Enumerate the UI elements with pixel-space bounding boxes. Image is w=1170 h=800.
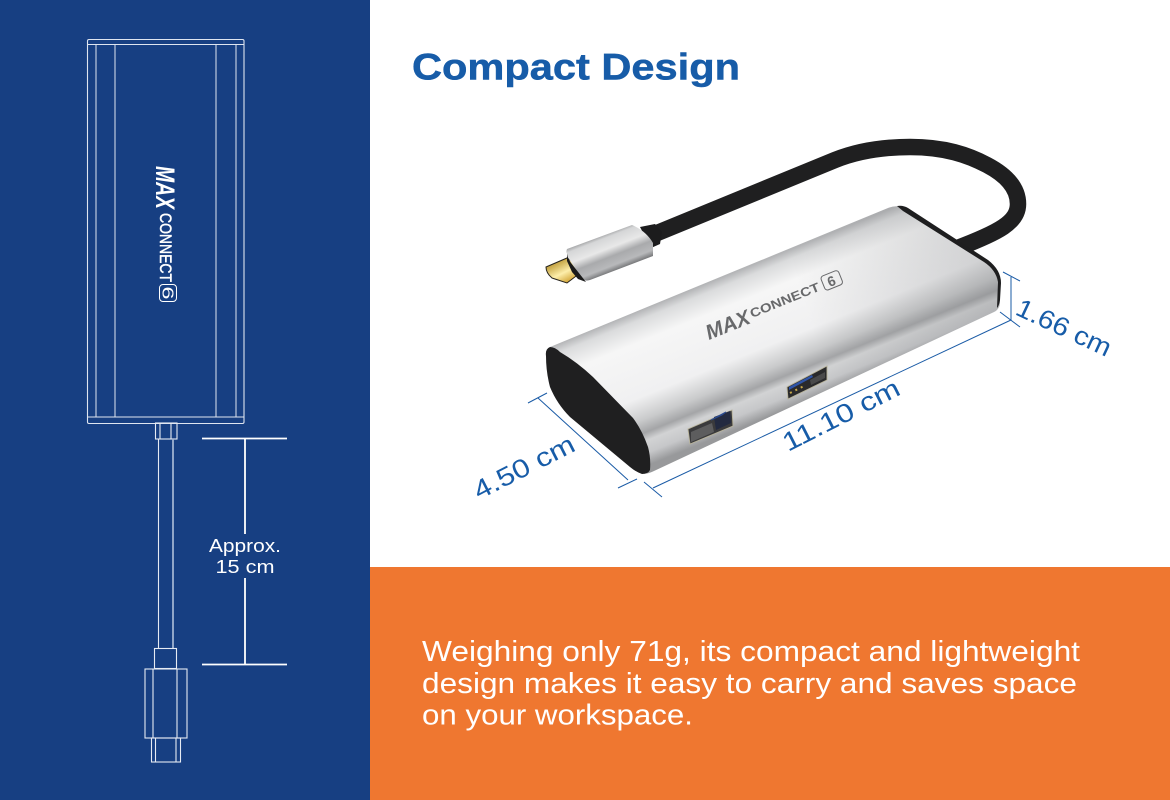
dimension: height 1.66 cm [1000, 272, 1117, 363]
logo: Max Connect 6 on line drawing: MAX [150, 166, 180, 210]
hub body [550, 206, 1000, 474]
text block: product description: on your workspace. [422, 700, 693, 732]
dimension: length 11.10 cm: 11.10 cm [777, 373, 905, 457]
line drawing: USB-C cable and connector [145, 423, 187, 762]
USB-C gold tip [546, 258, 584, 283]
title: Compact Design [412, 46, 740, 88]
logo: Max Connect 6 on hub: CONNECT [748, 280, 822, 321]
dimension: cable length approx 15 cm: Approx. [209, 535, 281, 556]
dimension: cable length approx 15 cm: 15 cm [216, 556, 274, 577]
logo: Max Connect 6 on hub: 6 [825, 272, 838, 290]
product image: USB-C hub [546, 147, 1018, 474]
cable [645, 147, 1018, 249]
text block: product description [422, 636, 1080, 732]
dimension: height 1.66 cm: 1.66 cm [1011, 292, 1117, 363]
panel: blue blueprint background [0, 0, 370, 800]
dimension: length 11.10 cm [644, 320, 1011, 497]
text block: product description: design makes it easy to carry and saves space [422, 668, 1077, 700]
dimension: width 4.50 cm [468, 393, 637, 505]
dimension: width 4.50 cm: 4.50 cm [468, 429, 580, 505]
logo: Max Connect 6 on line drawing [150, 166, 180, 302]
near end black cap [546, 347, 650, 474]
logo: Max Connect 6 on line drawing: CONNECT [156, 213, 175, 282]
logo: Max Connect 6 on hub: MAX [702, 305, 755, 345]
USB-A port 1 [688, 410, 733, 444]
far end black edge [897, 206, 1001, 308]
logo: Max Connect 6 on hub [702, 270, 844, 345]
logo: Max Connect 6 on line drawing: 6 [158, 286, 176, 300]
text block: product description: Weighing only 71g, its compact and lightweight [422, 636, 1080, 668]
panel: orange description background [370, 567, 1170, 800]
cable strain relief [640, 224, 662, 248]
USB-C silver shell [567, 225, 653, 281]
line drawing: hub top view [88, 40, 244, 424]
dimension: cable length approx 15 cm [202, 438, 287, 664]
USB-A port 2 [787, 366, 827, 399]
